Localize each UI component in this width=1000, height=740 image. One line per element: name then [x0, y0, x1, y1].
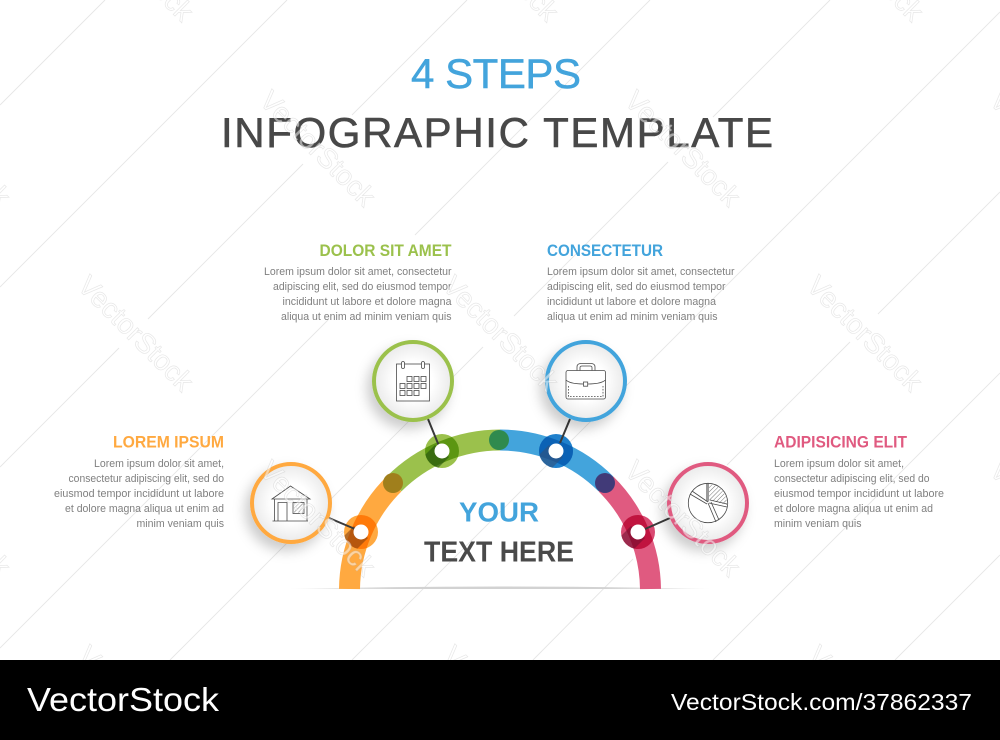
text block: lorem ipsum: Lorem ipsum dolor sit amet,: [94, 458, 224, 470]
text block: adipisicing elit: eiusmod tempor incididunt ut labore: [774, 488, 944, 500]
text block: lorem ipsum: minim veniam quis: [136, 518, 224, 530]
text block: adipisicing elit: ADIPISICING ELIT: [774, 432, 908, 452]
footer bar: VectorStock: [27, 681, 220, 718]
text block: consectetur: aliqua ut enim ad minim veniam quis: [547, 311, 718, 323]
text block: lorem ipsum: et dolore magna aliqua ut enim ad: [65, 503, 224, 515]
text block: consectetur: adipiscing elit, sed do eiusmod tempor: [547, 281, 726, 293]
title: 4 STEPS: [411, 50, 581, 97]
text block: lorem ipsum: consectetur adipiscing elit, sed do: [68, 473, 224, 485]
text block: adipisicing elit: consectetur adipiscing elit, sed do: [774, 473, 930, 485]
step 2 marker: [425, 418, 459, 468]
step 1 marker: [328, 515, 378, 549]
text block: consectetur: incididunt ut labore et dolore magna: [547, 296, 717, 308]
text block: dolor sit amet: DOLOR SIT AMET: [320, 241, 452, 260]
text block: dolor sit amet: adipiscing elit, sed do eiusmod tempor: [273, 281, 452, 293]
baseline shadow: [290, 586, 710, 589]
semicircular arc: [350, 440, 650, 589]
text block: lorem ipsum: [54, 432, 224, 530]
center label: YOUR: [459, 496, 539, 528]
watermarks: VectorStock: [72, 270, 200, 398]
watermarks: VectorStock: [619, 455, 747, 583]
text block: dolor sit amet: [264, 241, 452, 323]
step 4 icon circle: pie chart: [669, 464, 747, 542]
title: [221, 50, 773, 156]
text block: adipisicing elit: minim veniam quis: [774, 518, 862, 530]
step 4 marker: [621, 515, 670, 549]
text block: dolor sit amet: incididunt ut labore et dolore magna: [282, 296, 452, 308]
step 1 icon circle: house: [252, 464, 330, 542]
step 2 icon circle: calendar: [374, 342, 452, 420]
title: INFOGRAPHIC TEMPLATE: [221, 109, 773, 156]
text block: dolor sit amet: Lorem ipsum dolor sit amet, consectetur: [264, 266, 452, 278]
text block: consectetur: CONSECTETUR: [547, 241, 663, 260]
watermarks: VectorStock: [254, 85, 382, 213]
arc joint dots: [383, 430, 615, 493]
center label: TEXT HERE: [424, 536, 574, 568]
text block: lorem ipsum: LOREM IPSUM: [113, 432, 224, 452]
watermarks: VectorStock: [619, 85, 747, 213]
text block: dolor sit amet: aliqua ut enim ad minim veniam quis: [281, 311, 452, 323]
text block: adipisicing elit: Lorem ipsum dolor sit amet,: [774, 458, 904, 470]
text block: consectetur: Lorem ipsum dolor sit amet, consectetur: [547, 266, 735, 278]
text block: lorem ipsum: eiusmod tempor incididunt ut labore: [54, 488, 224, 500]
watermarks: VectorStock: [437, 270, 565, 398]
step 3 marker: [539, 418, 573, 468]
footer bar: VectorStock.com/37862337: [671, 689, 972, 715]
footer bar: [0, 660, 1000, 740]
text block: adipisicing elit: [774, 432, 944, 530]
watermarks: VectorStock: [254, 455, 382, 583]
watermarks: VectorStock: [801, 270, 929, 398]
text block: adipisicing elit: et dolore magna aliqua ut enim ad: [774, 503, 933, 515]
text block: consectetur: [547, 241, 735, 323]
center label: [424, 496, 574, 568]
step 3 icon circle: briefcase: [547, 342, 625, 420]
